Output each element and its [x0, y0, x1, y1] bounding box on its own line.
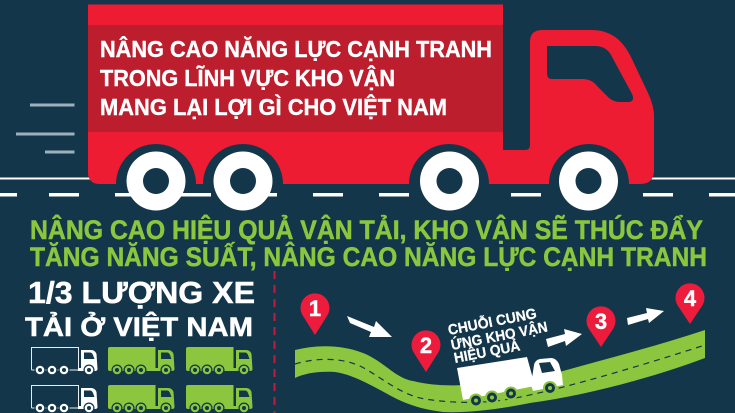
speed lines: [16, 104, 74, 154]
map pins: 2: [420, 333, 432, 358]
truck pictogram grid: [32, 347, 252, 413]
white truck on road: [457, 357, 563, 408]
truck cab: [480, 30, 654, 184]
road markings: [0, 178, 735, 196]
truck cargo box: [88, 4, 503, 184]
supply chain label: ỨNG KHO VẬN: [449, 318, 549, 354]
title: TRONG LĨNH VỰC KHO VẬN: [100, 64, 395, 91]
green headline: [30, 215, 707, 272]
map pins: 3: [595, 309, 607, 334]
map pins: 1: [309, 296, 321, 321]
supply chain label: HIỆU QUẢ: [452, 336, 522, 367]
title: [100, 35, 492, 120]
supply chain label: [446, 304, 549, 367]
map pins: [300, 283, 704, 372]
title: MANG LẠI LỢI GÌ CHO VIỆT NAM: [100, 93, 447, 120]
title: NÂNG CAO NĂNG LỰC CẠNH TRANH: [100, 35, 492, 62]
green headline: NÂNG CAO HIỆU QUẢ VẬN TẢI, KHO VẬN SẼ THÚC ĐẨY: [30, 215, 703, 245]
winding road: [295, 330, 705, 412]
cab window: [547, 46, 633, 102]
supply chain label: CHUỖI CUNG: [446, 304, 538, 339]
wheels: [116, 144, 629, 210]
statistic heading: TẢI Ở VIỆT NAM: [25, 310, 253, 342]
divider: [274, 271, 276, 413]
title band: [88, 25, 503, 132]
statistic heading: [25, 275, 255, 342]
arrows: [347, 308, 664, 347]
red delivery truck: [88, 4, 654, 210]
map pins: 4: [684, 286, 697, 311]
statistic heading: 1/3 LƯỢNG XE: [28, 275, 255, 310]
